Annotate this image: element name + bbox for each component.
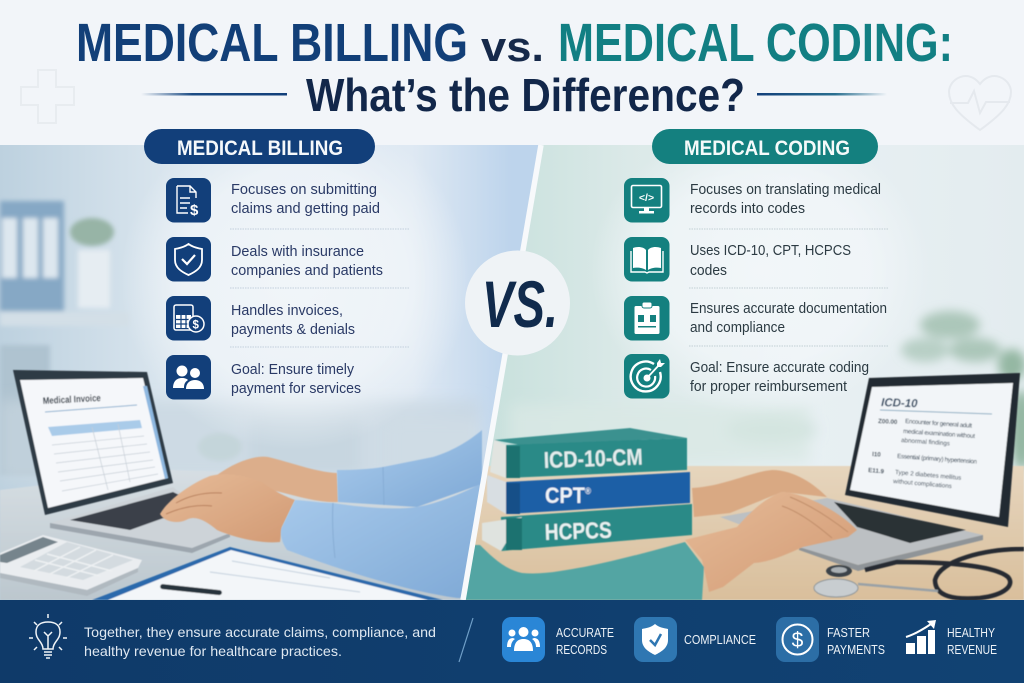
icon: faster payments dollar: $ [792, 629, 804, 652]
ICD-10 screen text: E11.9 [868, 467, 885, 475]
billing item one text: claims and getting paid [231, 201, 380, 217]
billing item three text: Handles invoices, [231, 303, 343, 319]
blurred office plant [70, 218, 242, 461]
heading: medical billing pill: MEDICAL BILLING [177, 137, 343, 160]
title line one: MEDICAL BILLING [76, 13, 468, 73]
label: faster payments: PAYMENTS [827, 642, 885, 657]
label: compliance: COMPLIANCE [684, 632, 756, 647]
panel: bottom summary band [0, 600, 1024, 683]
label: accurate records: ACCURATE [556, 625, 614, 640]
heading: medical coding pill [652, 129, 878, 164]
panel: billing list [166, 178, 410, 400]
book spine labels: ICD-10-CM [543, 444, 643, 473]
icon: calculator and coin [166, 296, 211, 340]
clipboard with form [92, 547, 443, 600]
icon: code monitor: </> [639, 192, 654, 204]
icon: invoice dollar: $ [190, 202, 199, 219]
icon: healthy revenue chart [906, 620, 936, 654]
icon: faster payments dollar [776, 617, 819, 662]
coding item four text: Goal: Ensure accurate coding [690, 360, 869, 376]
icon: watermark medical cross [21, 70, 74, 123]
header background band [0, 0, 1024, 145]
ICD-10 screen text: ICD-10 [881, 397, 918, 410]
stack of code books [482, 428, 692, 551]
label: healthy revenue: HEALTHY [947, 625, 995, 640]
summary text: Together, they ensure accurate claims, compliance, and [84, 624, 436, 640]
blurred clinic background [514, 408, 816, 460]
calculator [0, 535, 142, 596]
coding item two text: Uses ICD-10, CPT, HCPCS [690, 243, 851, 259]
icon: invoice dollar [166, 178, 211, 222]
panel: coding list [624, 178, 889, 398]
blue shirt sleeves [281, 430, 482, 598]
icon: open book [624, 237, 670, 282]
icon: lightbulb [29, 614, 67, 658]
icon: compliance shield [634, 617, 677, 662]
list backdrop wash [618, 164, 876, 376]
billing item one text: Focuses on submitting [231, 182, 377, 198]
stack of code books: CPT [545, 483, 589, 508]
coding item three text: Ensures accurate documentation [690, 301, 887, 317]
label: faster payments: FASTER [827, 625, 870, 640]
heading: medical coding pill: MEDICAL CODING [684, 137, 850, 160]
hands on keyboard [160, 457, 338, 542]
ICD-10 screen text: medical examination without [903, 428, 975, 440]
office binders [0, 198, 82, 470]
summary text: healthy revenue for healthcare practices. [84, 643, 342, 659]
billing laptop [13, 370, 230, 553]
icon: two people [166, 355, 211, 400]
billing item two text: companies and patients [231, 263, 383, 279]
title line one [76, 13, 953, 73]
stack of code books: ® [585, 486, 591, 496]
icon: clipboard [624, 296, 670, 340]
coding item three text: and compliance [690, 320, 785, 336]
vs badge: VS. [482, 267, 558, 341]
ICD-10 screen text: without complications [892, 478, 952, 490]
billing item four text: payment for services [231, 381, 361, 397]
heading: medical billing pill [144, 129, 375, 164]
icon: target arrow [624, 354, 670, 398]
icon: code monitor [624, 178, 670, 222]
invoice title on screen: Medical Invoice [43, 393, 101, 407]
ICD-10 screen text: Encounter for general adult [905, 418, 972, 430]
panel: coding photo background [460, 125, 1024, 600]
stack of code books: HCPCS [544, 517, 612, 545]
icon: shield check [166, 237, 211, 282]
billing item four text: Goal: Ensure timely [231, 362, 355, 378]
title line one: vs. [481, 23, 544, 70]
blurred green plant [901, 311, 1024, 470]
coding item one text: records into codes [690, 201, 805, 217]
ICD-10 screen text: I10 [872, 451, 881, 459]
ICD-10 screen text: Essential (primary) hypertension [897, 453, 978, 466]
blurred cabinets [0, 400, 480, 480]
panel: billing photo background [0, 110, 550, 600]
coding item four text: for proper reimbursement [690, 379, 847, 395]
coding item one text: Focuses on translating medical [690, 182, 881, 198]
icon: calculator and coin: $ [192, 320, 200, 332]
ICD-10 screen text: abnormal findings [901, 437, 950, 447]
grey desk [0, 480, 468, 600]
billing item two text: Deals with insurance [231, 244, 364, 260]
ICD-10 screen text [868, 397, 992, 490]
list backdrop wash [144, 162, 448, 434]
vs badge [465, 250, 570, 356]
ICD-10 screen text: Type 2 diabetes mellitus [895, 469, 962, 482]
icon: watermark heart pulse [949, 76, 1011, 130]
icon: accurate records [502, 617, 545, 662]
diagonal divider [463, 145, 541, 600]
coder hands and teal sleeve [462, 470, 857, 600]
coding laptop [720, 373, 1020, 571]
title [76, 13, 953, 121]
label: healthy revenue: REVENUE [947, 642, 997, 657]
ICD-10 screen text: Z00.00 [878, 418, 898, 426]
title line two: What’s the Difference? [306, 69, 745, 121]
billing item three text: payments & denials [231, 322, 355, 338]
coding item two text: codes [690, 263, 727, 279]
label: accurate records: RECORDS [556, 642, 607, 657]
tan desk [460, 466, 1024, 600]
stethoscope [814, 549, 1024, 599]
